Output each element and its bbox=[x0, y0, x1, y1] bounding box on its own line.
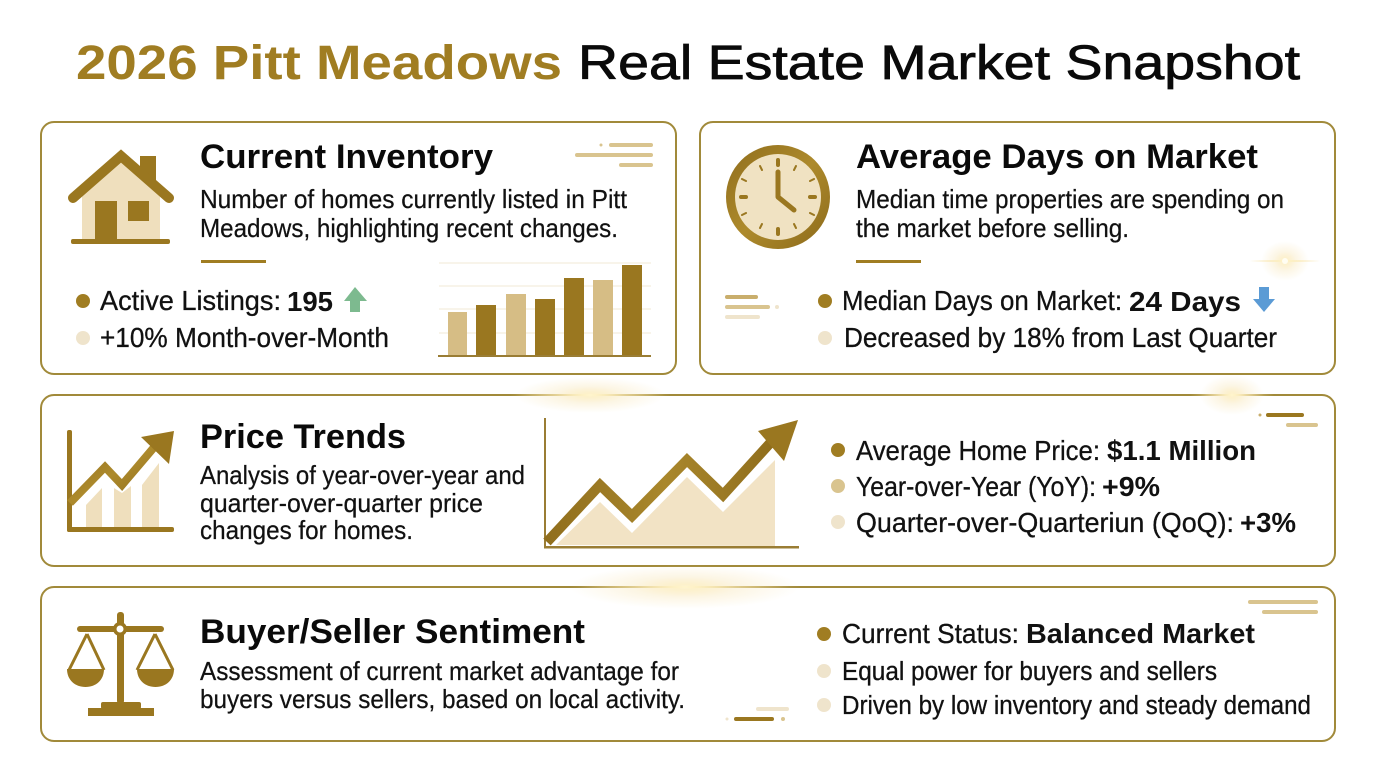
bullet: current status bbox=[817, 618, 1255, 649]
description: buyers versus sellers, based on local activity. bbox=[200, 684, 685, 714]
bullet: median days: 24 Days bbox=[1129, 286, 1241, 317]
bullet: active listings bbox=[76, 285, 333, 317]
sparkle bbox=[1250, 241, 1320, 281]
description bbox=[200, 656, 685, 714]
glow accent: price trends left bbox=[510, 377, 670, 413]
panel: buyer/seller sentiment bbox=[41, 587, 1335, 741]
description bbox=[200, 460, 525, 545]
description: the market before selling. bbox=[856, 213, 1129, 243]
bullet: active listings: 195 bbox=[287, 286, 333, 317]
bullet: average price: $1.1 Million bbox=[1107, 435, 1256, 466]
title: Real Estate Market Snapshot bbox=[578, 37, 1300, 90]
bullet: year over year: Year-over-Year (YoY): bbox=[856, 471, 1096, 502]
heading: Average Days on Market bbox=[856, 138, 1258, 176]
description bbox=[200, 184, 628, 243]
bullet: month over month: +10% Month-over-Month bbox=[100, 322, 389, 353]
heading: Price Trends bbox=[200, 418, 406, 456]
icon: down arrow bbox=[1253, 287, 1275, 312]
bullet: median days bbox=[818, 285, 1241, 317]
bullet: average price bbox=[831, 435, 1256, 466]
panel: average days on market bbox=[700, 122, 1335, 374]
bullet: equal power: Equal power for buyers and sellers bbox=[842, 658, 1217, 686]
bullet: driven by: Driven by low inventory and steady demand bbox=[842, 692, 1311, 720]
description: quarter-over-quarter price bbox=[200, 488, 483, 518]
description: Number of homes currently listed in Pitt bbox=[200, 184, 628, 214]
icon: up arrow bbox=[344, 287, 367, 312]
heading: Current Inventory bbox=[200, 138, 493, 176]
glow accent: sentiment bbox=[570, 565, 800, 609]
bullet: current status: Balanced Market bbox=[1026, 618, 1255, 649]
description bbox=[856, 184, 1284, 243]
bullet: current status: Current Status: bbox=[842, 618, 1019, 649]
bullet: quarter over quarter: +3% bbox=[1240, 507, 1296, 538]
title: 2026 Pitt Meadows bbox=[76, 37, 562, 90]
panel: current inventory bbox=[41, 122, 676, 374]
panel: price trends bbox=[41, 395, 1335, 566]
glow accent: price trends right bbox=[1190, 375, 1274, 415]
bullet: year over year: +9% bbox=[1102, 471, 1160, 502]
description: Meadows, highlighting recent changes. bbox=[200, 213, 618, 243]
title bbox=[76, 37, 1300, 90]
description: Analysis of year-over-year and bbox=[200, 460, 525, 490]
bullet: average price: Average Home Price: bbox=[856, 435, 1100, 466]
icon: trend chart bbox=[67, 430, 174, 532]
bar chart: listings bbox=[438, 263, 651, 357]
description: changes for homes. bbox=[200, 515, 413, 545]
area chart: price bbox=[544, 418, 799, 548]
icon: clock bbox=[726, 145, 830, 249]
bullet: median days: Median Days on Market: bbox=[842, 285, 1122, 316]
bullet: decrease: Decreased by 18% from Last Quarter bbox=[844, 322, 1277, 353]
heading: Buyer/Seller Sentiment bbox=[200, 613, 585, 651]
icon: house bbox=[71, 156, 170, 244]
bullet: active listings: Active Listings: bbox=[100, 285, 281, 316]
description: Median time properties are spending on bbox=[856, 184, 1284, 214]
bullet: quarter over quarter: Quarter-over-Quarteriun (QoQ): bbox=[856, 507, 1234, 538]
description: Assessment of current market advantage for bbox=[200, 656, 679, 686]
icon: scales bbox=[67, 612, 174, 716]
